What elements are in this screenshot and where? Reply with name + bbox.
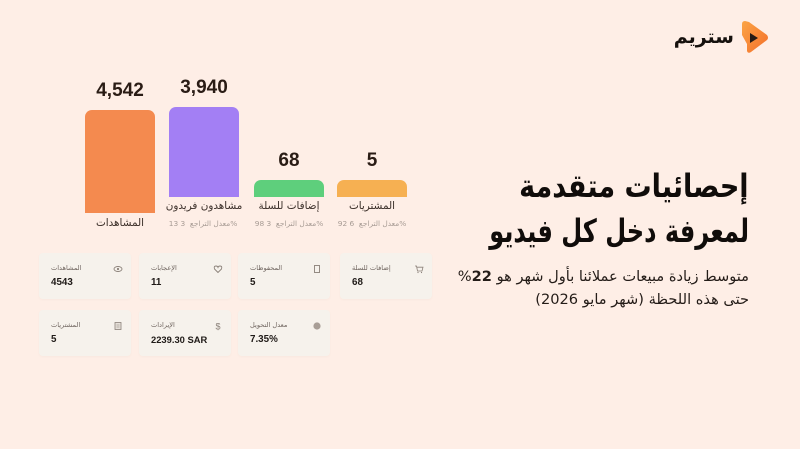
stat cards [51,264,424,345]
bar: views: المشاهدات [96,217,144,229]
bar: unique viewers: 13 3 معدل التراجع% [169,219,237,228]
card: conversion rate [238,310,330,356]
bar: views [85,80,155,229]
card: likes: 11 [151,277,161,288]
bar: add to cart: 68 [278,150,300,171]
title: لمعرفة دخل كل فيديو [489,212,749,250]
card: saved [238,253,330,299]
bar: unique viewers [166,77,242,228]
card: revenue: 2239.30 SAR [151,334,207,345]
card: views: 4543 [51,277,73,288]
bar: unique viewers: مشاهدون فريدون [166,200,242,212]
card: saved: 5 [250,277,255,288]
card: likes: الإعجابات [151,264,177,272]
description text: حتى هذه اللحظة (شهر مايو 2026) [535,291,749,308]
card: conversion rate: 7.35% [250,334,278,345]
card: views: المشاهدات [51,264,82,272]
bar: unique viewers: 3,940 [180,77,228,98]
description text [458,266,749,308]
card: add to cart: إضافات للسلة [352,264,391,272]
description text: متوسط زيادة مبيعات عملائنا بأول شهر هو 22% [458,268,749,285]
bar: purchases: المشتريات [349,200,395,212]
card: purchases [39,310,131,356]
bar chart [85,77,407,229]
bar: add to cart: 98 3 معدل التراجع% [255,219,323,228]
bar: add to cart [254,150,324,228]
bar: purchases: 92 6 معدل التراجع% [338,219,406,228]
title: إحصائيات متقدمة [520,167,749,205]
card: revenue: الإيرادات [151,320,175,328]
card: conversion rate: معدل التحويل [250,320,287,328]
logo [674,21,768,53]
card: views [39,253,131,299]
card: purchases: المشتريات [51,320,80,328]
card: saved: المحفوظات [250,264,282,272]
logo icon: play mark [742,21,768,53]
bar: purchases: 5 [367,150,377,171]
card: likes [139,253,231,299]
title [488,167,749,250]
card: revenue [139,310,231,356]
card: add to cart [340,253,432,299]
logo wordmark: ستريم [674,26,734,48]
bar: purchases [337,150,407,228]
bar: views: 4,542 [96,80,144,101]
bar: add to cart: إضافات للسلة [258,200,319,212]
card: add to cart: 68 [352,277,363,288]
card: purchases: 5 [51,334,56,345]
